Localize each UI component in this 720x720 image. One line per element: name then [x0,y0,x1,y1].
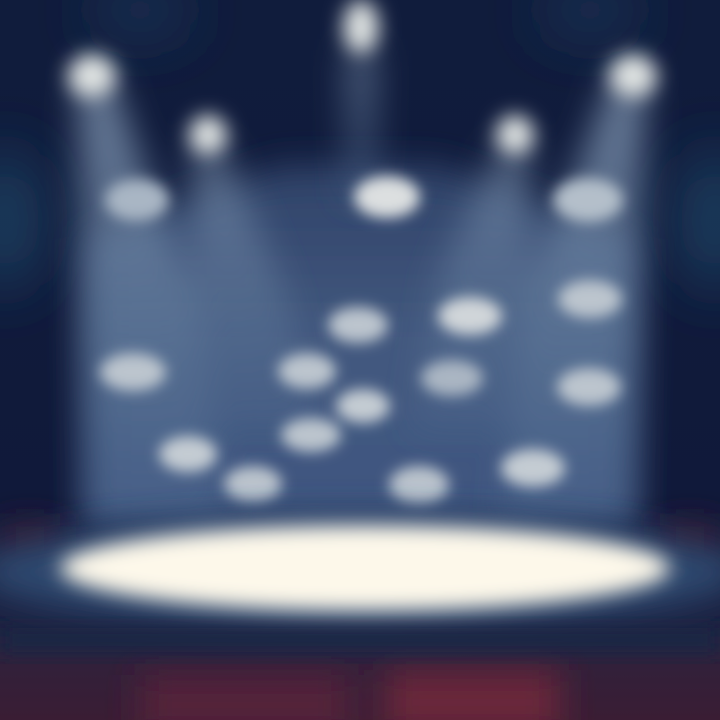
lamp: center [343,0,379,54]
floating labels [100,176,623,504]
beam: center [344,50,378,200]
spotlight lamps [68,0,657,155]
back wall light [85,165,635,525]
spotlight pool [60,525,670,611]
beam: far left [78,80,225,525]
lamp: inner right [496,115,534,155]
lamp: inner left [189,115,227,155]
red curtain base [0,630,720,720]
lamp: far right [609,54,657,98]
stage floor halo [0,516,720,628]
side glows [0,0,720,290]
beam: far right [500,80,645,525]
red curtain highlights [0,525,720,720]
beam: inner right [410,145,530,430]
stage edge shadow [0,628,720,652]
spotlight beams [78,50,645,525]
beam: inner left [190,145,320,430]
lamp: far left [68,54,116,98]
